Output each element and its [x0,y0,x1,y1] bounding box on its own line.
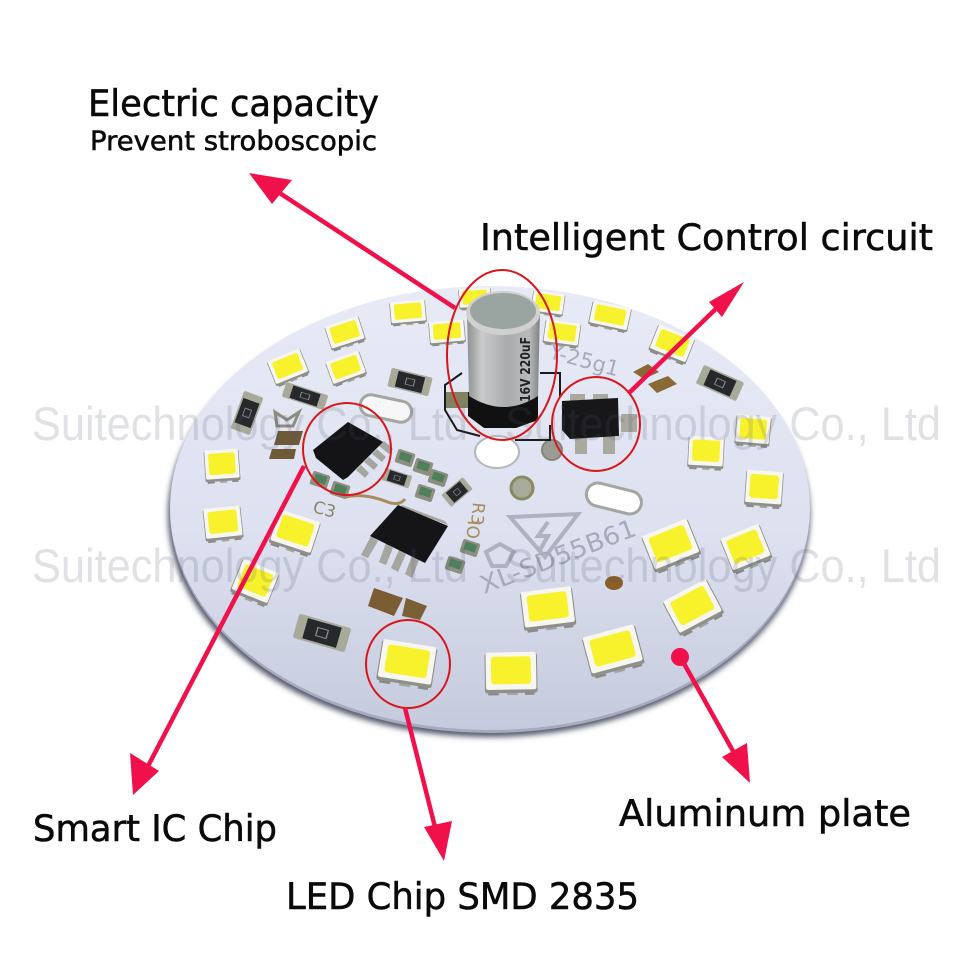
circuit board: aluminum plate [168,286,810,737]
highlight ring [366,620,450,708]
silkscreen marking: C3 [311,498,338,523]
callout: LED chip [286,620,639,918]
callout: electric capacity [88,82,557,440]
second IC chip [361,505,448,578]
silkscreen marking: XL-SD55B61 [476,513,640,600]
electrolytic capacitor: 16V 220uF [519,337,534,402]
electrolytic capacitor [445,291,560,440]
silkscreen marking [311,339,640,600]
callout: intelligent control circuit [480,216,933,471]
heading: Aluminum plate [619,792,911,835]
heading: Intelligent Control circuit [480,216,933,259]
LED chips [202,287,784,696]
arrow [405,708,452,861]
highlight ring [552,377,640,471]
green solder pads [309,449,481,574]
arrow [629,282,744,393]
resistors [231,365,744,653]
board holes [358,393,644,590]
marker dot [671,648,689,666]
heading: electric capacity: Electric capacity [88,82,379,125]
silkscreen marking: R3 [466,502,488,526]
heading: Smart IC Chip [33,807,277,850]
callout: aluminum plate [619,648,911,835]
watermark [32,397,941,592]
silkscreen marking: IO [461,520,483,540]
silkscreen marking: Y-25g1 [546,339,622,381]
highlight ring [303,403,391,495]
callout: smart IC chip [33,403,391,850]
arrow [249,173,455,308]
copper pads [269,364,677,620]
arrow [682,660,750,783]
copper traces [275,412,405,504]
arrow [130,466,304,795]
sub heading: Prevent stroboscopic [90,126,377,157]
highlight ring [447,270,557,440]
small IC chip inside circle [313,422,393,480]
watermark: Suitechnology Co., Ltd [32,539,468,592]
watermark: Suitechnology Co., Ltd [32,397,468,450]
control circuit chip [562,394,637,454]
heading: LED Chip SMD 2835 [286,875,639,918]
